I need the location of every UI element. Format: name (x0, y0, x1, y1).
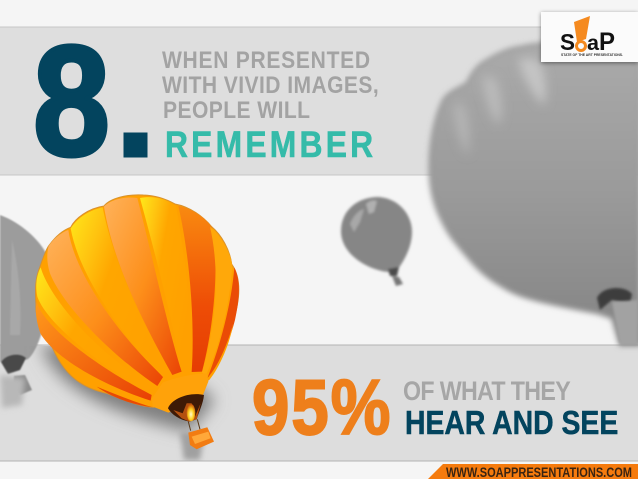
burner flame (187, 404, 195, 421)
shadow cast by the orange balloon (0, 345, 215, 460)
heading text (162, 45, 379, 166)
gore: yellow centre-left (71, 207, 172, 377)
gore: red far right (207, 267, 239, 378)
gore: lower orange (36, 302, 152, 401)
heading text: WITH VIVID IMAGES, (162, 70, 379, 98)
gore: bottom red sliver (97, 387, 153, 407)
panel: bottom statistic band (0, 345, 638, 461)
heading text: WHEN PRESENTED (162, 45, 370, 73)
logo wordmark: a (587, 32, 599, 55)
balloon envelope (35, 195, 239, 407)
statistic caption: HEAR AND SEE (405, 404, 618, 442)
logo wordmark: S (560, 29, 575, 55)
panel: top heading band (0, 27, 638, 175)
logo exclamation mark (574, 16, 590, 42)
logo tagline: STATE OF THE ART PRESENTATIONS. (561, 52, 623, 57)
statistic 95%: 95% (252, 364, 390, 451)
gore: right rim (207, 323, 233, 380)
statistic caption: OF WHAT THEY (403, 376, 571, 406)
basket ropes (188, 419, 200, 431)
heading numeral 8: 8 (33, 14, 110, 189)
gore: red right (178, 206, 216, 372)
burner mouth (168, 394, 204, 422)
numeral square dot (124, 132, 148, 158)
balloon neck (152, 373, 208, 413)
logo wordmark: P (599, 28, 615, 56)
gore: peach centre (104, 197, 182, 375)
illustration: orange hot air balloon (35, 195, 239, 449)
gore: yellow left (36, 267, 157, 393)
logo card (541, 12, 638, 62)
illustration: left grey balloon (0, 215, 47, 395)
gore: yellow centre-right (140, 197, 192, 373)
basket (188, 427, 214, 449)
logo wordmark (560, 28, 615, 56)
illustration: large blurred grey balloon (430, 42, 638, 345)
heading text: PEOPLE WILL (163, 95, 310, 123)
illustration: small distant grey balloon (341, 197, 412, 286)
gore: yellow right (202, 227, 232, 375)
gore: peach to red (47, 230, 163, 386)
heading text: REMEMBER (165, 125, 373, 166)
statistic caption (403, 376, 618, 442)
